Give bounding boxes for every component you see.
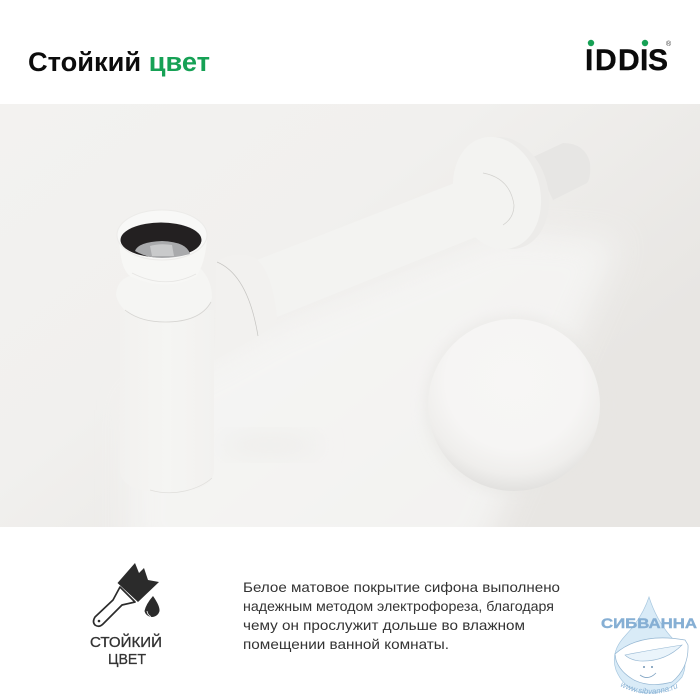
brush bristles [118,563,159,602]
icon caption: СТОЙКИЙ [90,633,162,651]
lower socket body [125,302,212,322]
wall flange [512,199,540,249]
siphon cylinder [150,478,212,493]
inner metal [135,241,190,258]
icon: paint brush with drop [94,563,160,626]
description text: помещении ванной комнаты. [243,636,449,652]
halo around colour disc [424,315,604,495]
watermark url: www.sibvanna.ru [620,682,678,694]
logo: IDDIS: IDDIS [585,44,668,77]
icon caption [90,633,162,668]
black gasket [120,222,202,258]
photo background [0,104,700,527]
description text: Белое матовое покрытие сифона выполнено [243,579,560,595]
icon caption: ЦВЕТ [108,652,146,668]
description text: чему он прослужит дольше во влажном [243,617,525,633]
description text [243,579,560,652]
colour sample disc [428,319,600,491]
watermark name: СИБВАННА [601,615,697,631]
description text: надежным методом электрофореза, благодаря [243,598,554,614]
shadow of siphon on the floor [220,435,320,455]
threaded socket [117,210,207,284]
title: Стойкий цвет [28,47,210,77]
elbow collar [217,262,258,336]
water drop [614,597,685,693]
paint drop [144,596,160,617]
logo: IDDIS: ® [666,40,672,48]
horizontal tube [483,172,514,226]
brush handle [94,587,135,626]
floor highlight under tube [144,245,602,527]
watermark: Сибванна [601,596,697,694]
photo panel: white siphon [0,104,700,560]
wall pipe end [533,143,590,200]
bath [615,638,688,685]
bath face [643,666,645,668]
